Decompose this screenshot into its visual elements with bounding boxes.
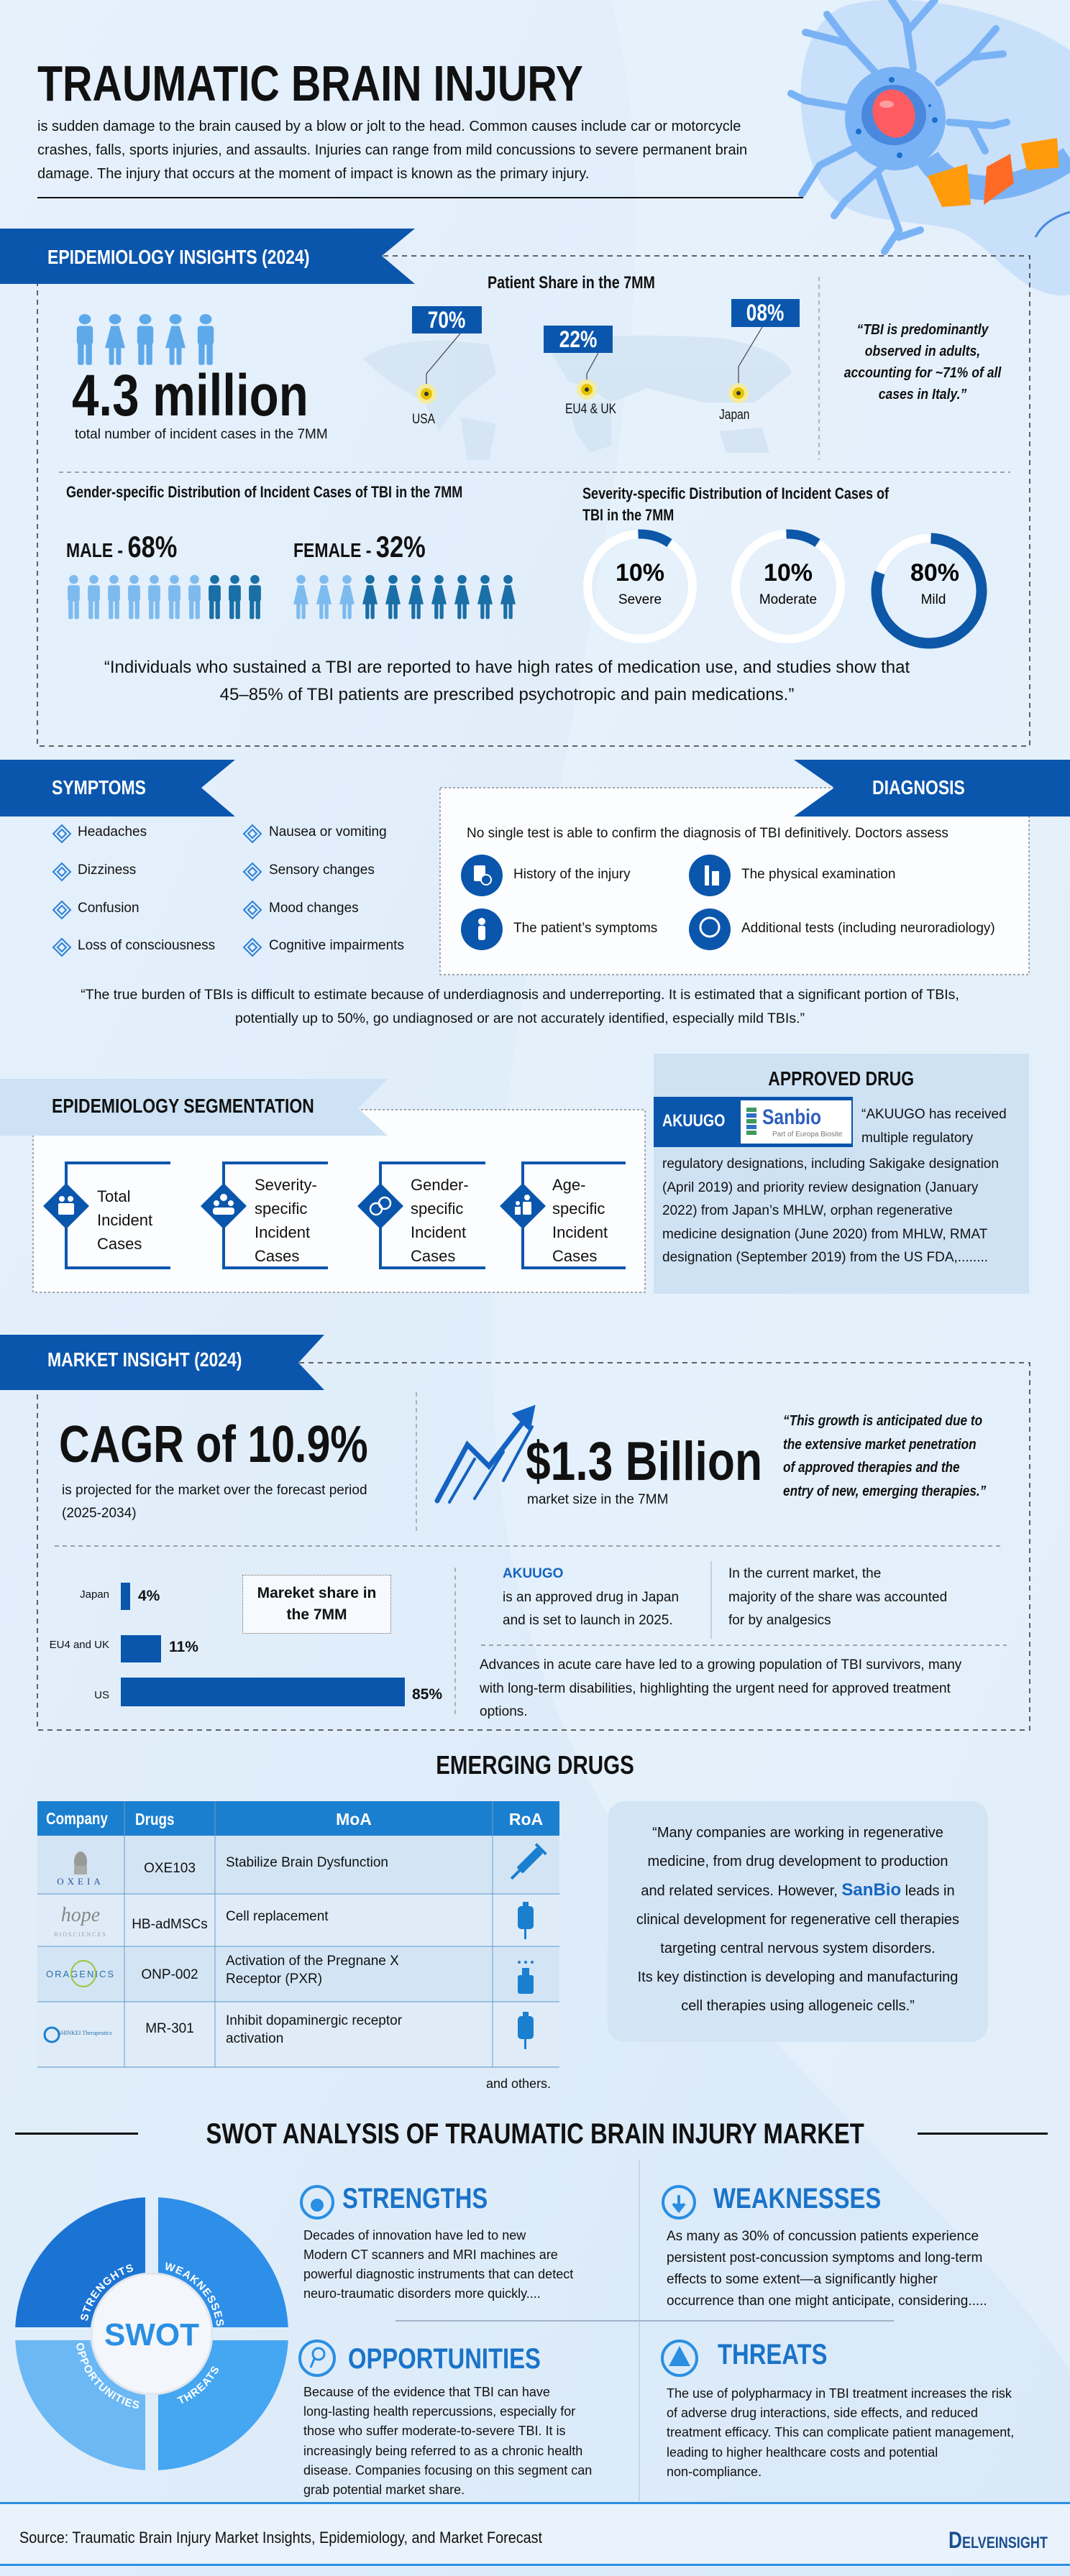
callout: adults quote xyxy=(844,322,1002,402)
panel: approved drug: “AKUUGO has received xyxy=(861,1107,1007,1122)
company logos: hope xyxy=(61,1904,100,1926)
panel: diagnosis xyxy=(440,760,1070,975)
chart: severity distribution donuts: 80% xyxy=(910,559,959,586)
panel: strengths: Decades of innovation have led to new xyxy=(303,2228,526,2242)
heading: SWOT analysis xyxy=(15,2118,1048,2150)
logo: DelveInsight: DELVEINSIGHT xyxy=(948,2527,1048,2553)
chart title: Patient Share in the 7MM xyxy=(488,273,655,293)
callout: growth quote: “This growth is anticipated due to xyxy=(783,1413,982,1429)
panel: epidemiology segmentation: specific xyxy=(255,1200,307,1218)
panel: epidemiology segmentation: specific xyxy=(552,1200,605,1218)
text: AKUUGO note xyxy=(503,1566,679,1628)
chart: SWOT wheel xyxy=(15,2160,894,2501)
panel: approved drug: 2022) from Japan’s MHLW, orphan regenerative xyxy=(662,1203,953,1218)
table: emerging drugs: ONP-002 xyxy=(141,1967,198,1982)
chart: severity distribution donuts xyxy=(582,484,987,648)
chart: gender distribution xyxy=(66,483,516,620)
heading: symptoms: SYMPTOMS xyxy=(52,776,146,799)
panel: weaknesses: effects to some extent—a significantly higher xyxy=(667,2272,938,2287)
source text: Source: Traumatic Brain Injury Market Insights, Epidemiology, and Market Forecast xyxy=(19,2529,542,2547)
panel: diagnosis: The patient’s symptoms xyxy=(513,921,657,936)
swot icons xyxy=(300,2186,697,2375)
chart: severity distribution donuts: TBI in the 7MM xyxy=(582,506,674,524)
callout: SanBio quote: medicine, from drug development to production xyxy=(647,1854,948,1869)
panel: weaknesses: WEAKNESSES xyxy=(713,2183,881,2214)
chart: severity distribution donuts: 10% xyxy=(616,559,664,586)
table: emerging drugs: Stabilize Brain Dysfunction xyxy=(226,1855,388,1870)
logo: AKUUGO Sanbio xyxy=(654,1097,853,1147)
intro text: damage. The injury that occurs at the moment of impact is known as the primary injury. xyxy=(37,166,589,182)
callout: SanBio quote: Its key distinction is developing and manufacturing xyxy=(638,1969,958,1985)
intro text xyxy=(37,119,747,182)
text: advances note xyxy=(480,1657,962,1719)
chart: patient share map: USA xyxy=(412,412,435,427)
footer xyxy=(0,2502,1070,2567)
stat: CAGR: (2025-2034) xyxy=(62,1506,137,1521)
panel: threats: The use of polypharmacy in TBI treatment increases the risk xyxy=(667,2386,1012,2401)
box: EU4 22%: 22% xyxy=(559,326,597,352)
panel: approved drug xyxy=(654,1054,1029,1294)
company logos: OXEIA xyxy=(57,1876,104,1887)
icon: syringe xyxy=(506,1843,547,1884)
panel: threats xyxy=(667,2339,1014,2479)
panel: diagnosis: No single test is able to confirm the diagnosis of TBI definitively. Doctors assess xyxy=(467,826,948,841)
panel: epidemiology segmentation: Cases xyxy=(255,1247,299,1265)
bar chart: market share: EU4 and UK xyxy=(50,1639,109,1651)
table: emerging drugs: RoA xyxy=(509,1810,543,1828)
panel: epidemiology segmentation: specific xyxy=(411,1200,463,1218)
table: emerging drugs: Receptor (PXR) xyxy=(226,1972,322,1987)
company logos: SHINKEI Therapeutics xyxy=(58,2030,112,2036)
chart: SWOT wheel: STRENGHTS xyxy=(81,2264,133,2321)
stat: market size: market size in the 7MM xyxy=(527,1492,668,1507)
stat: CAGR: is projected for the market over the forecast period xyxy=(62,1483,367,1498)
callout: adults quote: cases in Italy.” xyxy=(879,387,966,402)
panel: epidemiology segmentation: Age- xyxy=(552,1176,585,1194)
panel: epidemiology segmentation: Incident xyxy=(97,1211,152,1229)
panel: market insight xyxy=(0,1335,1030,1731)
text: advances note: options. xyxy=(480,1704,528,1719)
panel: epidemiology segmentation: Incident xyxy=(255,1223,310,1241)
callout: SanBio quote xyxy=(608,1801,988,2042)
chart: patient share map: Japan xyxy=(719,408,749,423)
panel: epidemiology segmentation: Gender- xyxy=(411,1176,469,1194)
panel: epidemiology segmentation: Severity- xyxy=(255,1176,317,1194)
panel: opportunities: long-lasting health repercussions, especially for xyxy=(303,2404,575,2419)
chart: gender distribution: Gender-specific Distribution of Incident Cases of TBI in the 7MM xyxy=(66,483,462,501)
people icons: total cases xyxy=(76,314,214,365)
callout: growth quote: entry of new, emerging therapies.” xyxy=(783,1484,986,1499)
stat: 4.3 million: total number of incident cases in the 7MM xyxy=(75,427,328,442)
panel: threats: non-compliance. xyxy=(667,2465,762,2479)
logo: AKUUGO Sanbio: AKUUGO xyxy=(662,1111,725,1131)
stat: market size: $1.3 Billion xyxy=(526,1431,762,1492)
callout: SanBio quote: targeting central nervous system disorders. xyxy=(660,1941,936,1956)
panel: diagnosis: Additional tests (including neuroradiology) xyxy=(741,921,995,936)
callout: growth quote: the extensive market penetration xyxy=(783,1436,977,1452)
callout: underdiagnosis quote: potentially up to 50%, go undiagnosed or are not accurately identified, especially mild TBIs.” xyxy=(235,1011,805,1026)
box: USA 70% xyxy=(412,306,482,334)
chart: SWOT wheel: THREATS xyxy=(177,2366,219,2404)
text: AKUUGO note: and is set to launch in 2025. xyxy=(503,1613,673,1628)
panel: opportunities: those who suffer moderate-to-severe TBI. It is xyxy=(303,2424,565,2438)
panel: strengths: Modern CT scanners and MRI machines are xyxy=(303,2248,558,2262)
bar chart: market share: US xyxy=(94,1689,109,1701)
panel: opportunities: Because of the evidence that TBI can have xyxy=(303,2385,550,2399)
table: emerging drugs: Cell replacement xyxy=(226,1909,329,1924)
panel: epidemiology insights xyxy=(0,229,1030,747)
panel: symptoms xyxy=(0,760,404,957)
heading: epidemiology segmentation: EPIDEMIOLOGY SEGMENTATION xyxy=(52,1095,314,1117)
callout: underdiagnosis quote xyxy=(81,987,959,1026)
callout: growth quote xyxy=(783,1413,987,1499)
table: emerging drugs: OXE103 xyxy=(144,1861,196,1876)
callout: medication quote: “Individuals who sustained a TBI are reported to have high rates of medication use, and studies show that xyxy=(104,658,910,677)
panel: approved drug: APPROVED DRUG xyxy=(769,1067,914,1090)
callout: growth quote: of approved therapies and the xyxy=(783,1460,960,1476)
title: TRAUMATIC BRAIN INJURY xyxy=(37,55,583,111)
chart: SWOT wheel: WEAKNESSES xyxy=(165,2262,224,2326)
panel: approved drug: multiple regulatory xyxy=(861,1131,973,1146)
text: AKUUGO note: is an approved drug in Japan xyxy=(503,1590,679,1604)
panel: epidemiology segmentation: Cases xyxy=(97,1235,142,1253)
symptom list: Nausea or vomiting xyxy=(269,824,387,840)
panel: strengths xyxy=(303,2183,574,2301)
panel: approved drug: designation (September 2019) from the US FDA,........ xyxy=(662,1250,988,1265)
panel: weaknesses: persistent post-concussion symptoms and long-term xyxy=(667,2250,982,2266)
callout: adults quote: “TBI is predominantly xyxy=(857,322,988,338)
logo: AKUUGO Sanbio: Sanbio xyxy=(762,1105,821,1129)
text: analgesics note: majority of the share was accounted xyxy=(728,1590,947,1604)
heading: diagnosis: DIAGNOSIS xyxy=(872,776,965,799)
panel: epidemiology segmentation: Incident xyxy=(552,1223,608,1241)
text: and others. xyxy=(486,2076,551,2091)
stat: CAGR: CAGR of 10.9% xyxy=(59,1416,368,1473)
table: emerging drugs: activation xyxy=(226,2031,283,2046)
bar chart: market share: Japan xyxy=(80,1588,109,1601)
chart: severity distribution donuts: Severe xyxy=(618,592,662,607)
table: emerging drugs: Drugs xyxy=(135,1810,174,1828)
panel: threats: treatment efficacy. This can complicate patient management, xyxy=(667,2425,1014,2439)
callout: SanBio quote: “Many companies are working in regenerative xyxy=(652,1825,943,1841)
logo: AKUUGO Sanbio: Part of Europa Biosite xyxy=(772,1131,842,1138)
panel: opportunities: disease. Companies focusing on this segment can xyxy=(303,2463,592,2478)
panel: epidemiology segmentation xyxy=(0,1079,646,1292)
panel: approved drug: (April 2019) and priority review designation (January xyxy=(662,1180,978,1195)
box: Japan 08% xyxy=(731,299,800,327)
panel: diagnosis: The physical examination xyxy=(741,867,895,882)
panel: opportunities xyxy=(303,2343,592,2497)
symptom list: Confusion xyxy=(78,901,140,916)
callout: underdiagnosis quote: “The true burden of TBIs is difficult to estimate because of underdiagnosis and underreporting. It is estimated that a significant portion of TBIs, xyxy=(81,987,959,1003)
panel: opportunities: grab potential market share. xyxy=(303,2483,465,2497)
intro text: is sudden damage to the brain caused by a blow or jolt to the head. Common causes include car or motorcycle xyxy=(37,119,741,134)
symptom list: Headaches xyxy=(78,824,147,840)
callout: medication quote xyxy=(104,658,910,704)
text: analgesics note: In the current market, the xyxy=(728,1566,881,1581)
neuron illustration xyxy=(787,0,1070,295)
chart: severity distribution donuts: Moderate xyxy=(759,592,817,607)
panel: weaknesses xyxy=(667,2183,987,2309)
panel: threats: THREATS xyxy=(718,2339,827,2370)
symptom list: Dizziness xyxy=(78,862,136,878)
bar chart: market share xyxy=(50,1575,442,1706)
heading: SWOT analysis: SWOT ANALYSIS OF TRAUMATIC BRAIN INJURY MARKET xyxy=(206,2118,864,2150)
intro text: crashes, falls, sports injuries, and assaults. Injuries can range from mild concussions to severe permanent brain xyxy=(37,142,747,158)
symptom list: Sensory changes xyxy=(269,862,375,878)
panel: threats: of adverse drug interactions, side effects, and reduced xyxy=(667,2406,978,2420)
chart: gender distribution: FEMALE - 32% xyxy=(293,530,426,564)
panel: epidemiology segmentation: Cases xyxy=(552,1247,597,1265)
company logos: ORAGENICS xyxy=(46,1969,115,1979)
callout: adults quote: accounting for ~71% of all xyxy=(844,365,1001,381)
panel: epidemiology segmentation: Incident xyxy=(411,1223,466,1241)
legend box: the 7MM xyxy=(286,1606,347,1623)
heading: emerging drugs: EMERGING DRUGS xyxy=(436,1750,634,1780)
panel: diagnosis: History of the injury xyxy=(513,867,631,882)
panel: opportunities: increasingly being referred to as a chronic health xyxy=(303,2444,582,2458)
panel: strengths: STRENGTHS xyxy=(342,2183,488,2214)
company logos: BIOSCIENCES xyxy=(54,1931,107,1938)
callout: SanBio quote: cell therapies using allogeneic cells.” xyxy=(681,1998,915,2014)
panel: epidemiology segmentation: Total xyxy=(97,1187,130,1205)
table: emerging drugs: Company xyxy=(46,1809,108,1828)
text: analgesics note: for by analgesics xyxy=(728,1613,831,1628)
table: emerging drugs: HB-adMSCs xyxy=(132,1917,208,1932)
company logos xyxy=(45,1852,115,2042)
callout: adults quote: observed in adults, xyxy=(865,344,980,359)
chart: SWOT wheel: SWOT xyxy=(104,2317,199,2352)
panel: epidemiology segmentation: Cases xyxy=(411,1247,455,1265)
text: advances note: with long-term disabilities, highlighting the urgent need for approved treatment xyxy=(480,1680,951,1696)
text: analgesics note xyxy=(728,1566,947,1628)
heading: market insight: MARKET INSIGHT (2024) xyxy=(47,1348,242,1371)
panel: weaknesses: As many as 30% of concussion patients experience xyxy=(667,2229,979,2244)
text: advances note: Advances in acute care have led to a growing population of TBI survivors, many xyxy=(480,1657,961,1673)
table: emerging drugs: MR-301 xyxy=(145,2021,194,2036)
chart: severity distribution donuts: Mild xyxy=(921,592,946,607)
chart: patient share map xyxy=(364,273,800,460)
symptom list xyxy=(78,824,404,953)
symptom list: Mood changes xyxy=(269,901,359,916)
bar chart: market share: 4% xyxy=(138,1588,160,1604)
box: Japan 08%: 08% xyxy=(746,300,785,326)
stat: 4.3 million: 4.3 million xyxy=(72,363,308,428)
panel: opportunities: OPPORTUNITIES xyxy=(348,2343,541,2375)
table: emerging drugs: Activation of the Pregnane X xyxy=(226,1954,399,1969)
symptom list: Cognitive impairments xyxy=(269,938,404,953)
panel: strengths: powerful diagnostic instruments that can detect xyxy=(303,2267,573,2281)
table: emerging drugs xyxy=(37,1801,559,2068)
text: AKUUGO note: AKUUGO xyxy=(503,1566,563,1581)
box: USA 70%: 70% xyxy=(428,307,466,333)
table: emerging drugs: MoA xyxy=(336,1810,372,1828)
chart: SWOT wheel: OPPORTUNITIES xyxy=(76,2343,140,2409)
callout: SanBio quote: clinical development for regenerative cell therapies xyxy=(636,1912,959,1928)
bar chart: market share: 11% xyxy=(169,1639,198,1655)
callout: SanBio quote: and related services. However, SanBio leads in xyxy=(641,1880,955,1900)
legend box xyxy=(242,1575,391,1634)
heading: epidemiology insights: EPIDEMIOLOGY INSIGHTS (2024) xyxy=(47,246,309,268)
icon: growth arrows xyxy=(434,1404,536,1504)
panel: weaknesses: occurrence than one might anticipate, considering..... xyxy=(667,2294,987,2309)
panel: strengths: neuro-traumatic disorders more quickly.... xyxy=(303,2286,541,2301)
icon: iv bag xyxy=(518,1902,534,1939)
symptom list: Loss of consciousness xyxy=(78,938,215,953)
legend box: Mareket share in xyxy=(257,1585,376,1601)
bar chart: market share: 85% xyxy=(412,1686,442,1703)
chart: severity distribution donuts: Severity-specific Distribution of Incident Cases of xyxy=(582,484,889,502)
stat: CAGR xyxy=(59,1416,368,1521)
table: emerging drugs: Inhibit dopaminergic receptor xyxy=(226,2013,402,2028)
panel: approved drug: regulatory designations, including Sakigake designation xyxy=(662,1156,999,1172)
chart: patient share map: EU4 & UK xyxy=(565,402,616,417)
chart: gender distribution: MALE - 68% xyxy=(66,530,177,564)
box: EU4 22% xyxy=(544,326,613,353)
chart: severity distribution donuts: 10% xyxy=(764,559,813,586)
panel: threats: leading to higher healthcare costs and potential xyxy=(667,2445,938,2460)
callout: medication quote: 45–85% of TBI patients are prescribed psychotropic and pain medications.” xyxy=(220,685,794,704)
panel: approved drug: medicine designation (June 2020) from MHLW, RMAT xyxy=(662,1226,987,1242)
